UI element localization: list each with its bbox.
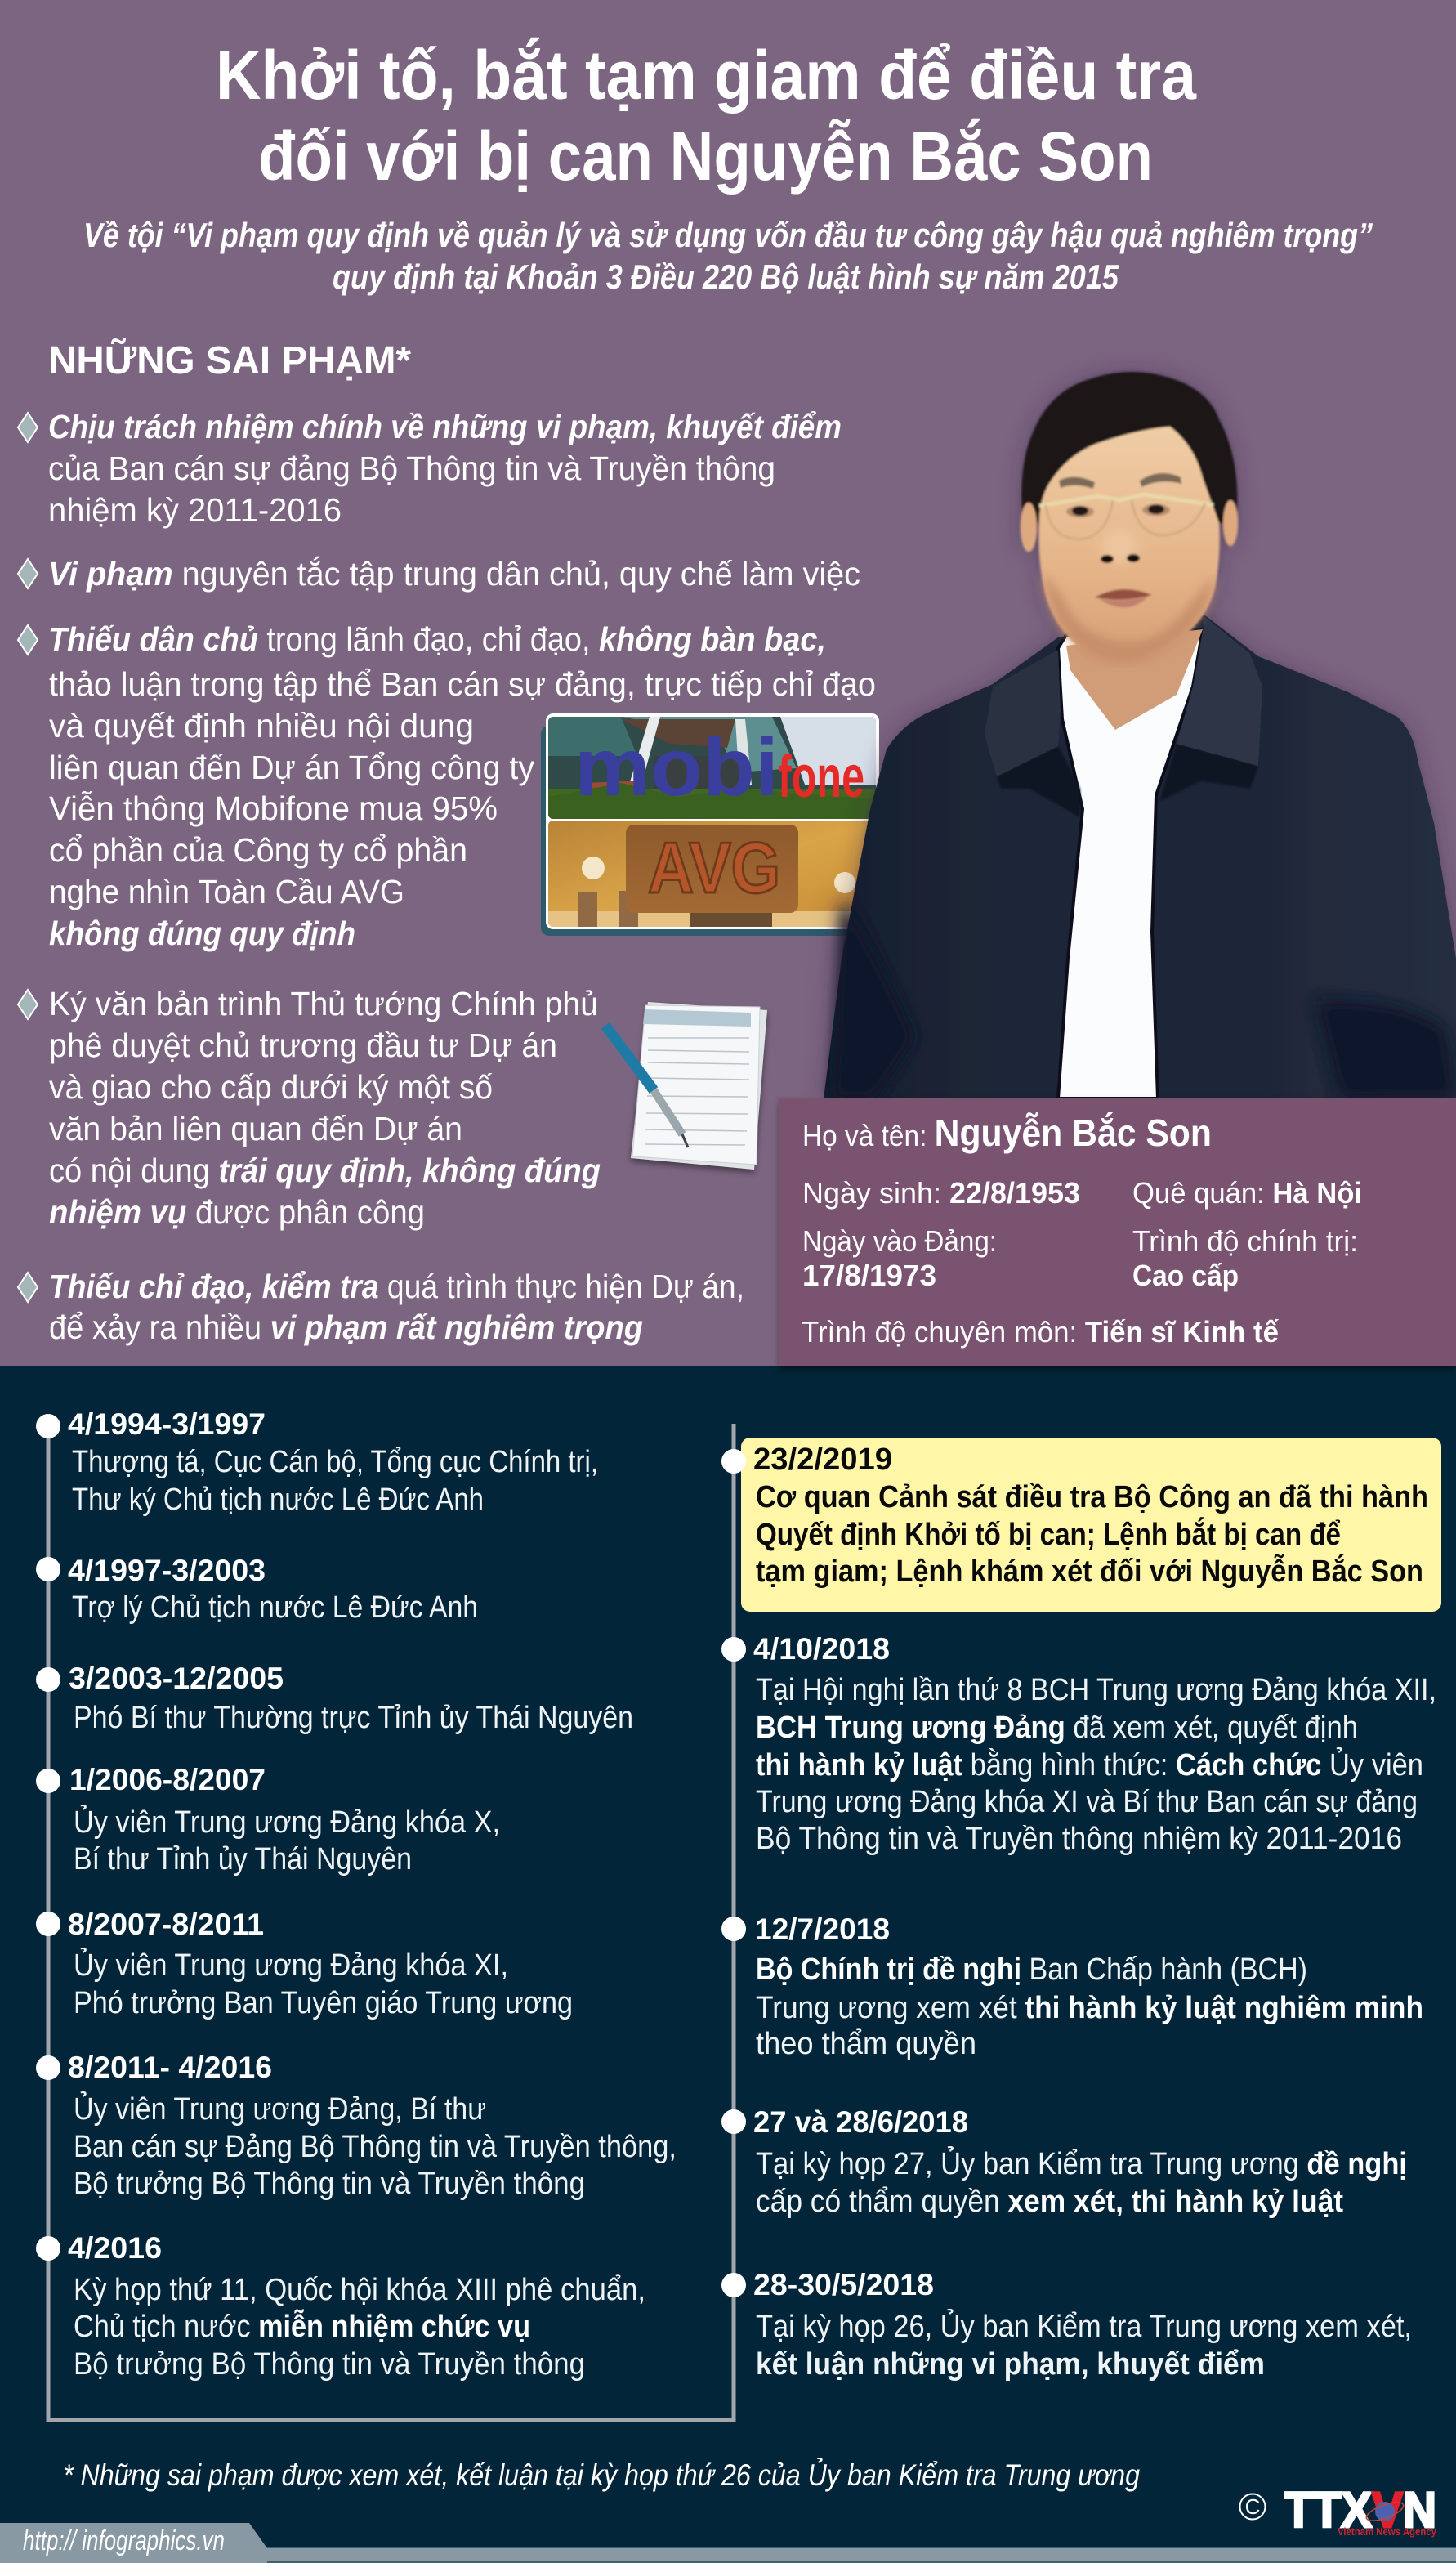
bullet 4: và giao cho cấp dưới ký một số xyxy=(49,1068,493,1106)
hometown: Quê quán: Hà Nội xyxy=(1132,1176,1362,1210)
bullet 4: phê duyệt chủ trương đầu tư Dự án xyxy=(49,1027,557,1064)
event 4/2016: Bộ trưởng Bộ Thông tin và Truyền thông xyxy=(74,2347,585,2382)
bullet 3: liên quan đến Dự án Tổng công ty xyxy=(49,749,534,786)
highlighted event 23/2/2019 xyxy=(721,1438,1441,1612)
event 2011-2016: Ủy viên Trung ương Đảng, Bí thư xyxy=(74,2091,486,2127)
political level: Trình độ chính trị: xyxy=(1132,1224,1358,1258)
title xyxy=(216,37,1197,195)
logo: TTXVN: C xyxy=(1245,2494,1260,2519)
event 12/7/2018: Bộ Chính trị đề nghị Ban Chấp hành (BCH) xyxy=(756,1952,1307,1987)
event 4/2016 xyxy=(36,2231,645,2382)
event 28-30/5/2018 xyxy=(721,2268,1412,2382)
event 27 và 28/6/2018: 27 và 28/6/2018 xyxy=(753,2105,968,2139)
event 4/2016: Chủ tịch nước miễn nhiệm chức vụ xyxy=(74,2308,530,2344)
political level xyxy=(1132,1224,1358,1292)
panel: case timeline right column xyxy=(721,1438,1441,2382)
event 4/10/2018 xyxy=(721,1632,1436,1856)
portrait of Nguyễn Bắc Son xyxy=(824,372,1456,1098)
bullet 3 xyxy=(18,620,876,952)
event 2011-2016: Bộ trưởng Bộ Thông tin và Truyền thông xyxy=(74,2167,585,2201)
event 1994-1997: Thư ký Chủ tịch nước Lê Đức Anh xyxy=(72,1483,484,1517)
event 1994-1997 xyxy=(36,1407,598,1517)
panel: dark timeline background xyxy=(0,1366,1456,2563)
event 1994-1997: Thượng tá, Cục Cán bộ, Tổng cục Chính trị, xyxy=(72,1445,598,1479)
panel: purple upper background xyxy=(0,0,1456,1366)
photo: AVG sign xyxy=(548,821,876,927)
bullet 4 xyxy=(18,985,601,1231)
bullet 2: Vi phạm nguyên tắc tập trung dân chủ, quy chế làm việc xyxy=(48,555,860,593)
event 2007-2011 xyxy=(36,1908,573,2020)
event 2006-2007: Bí thư Tỉnh ủy Thái Nguyên xyxy=(74,1842,412,1876)
icon: document and pen xyxy=(605,1002,767,1170)
bullet 1: của Ban cán sự đảng Bộ Thông tin và Truyền thông xyxy=(48,450,775,487)
image: Mobifone and AVG photos xyxy=(541,713,879,936)
event 28-30/5/2018: kết luận những vi phạm, khuyết điểm xyxy=(756,2347,1265,2382)
bullet 3: Viễn thông Mobifone mua 95% xyxy=(49,789,498,827)
event 27 và 28/6/2018: cấp có thẩm quyền xem xét, thi hành kỷ luật xyxy=(756,2185,1343,2219)
photo: Mobifone building: fone xyxy=(778,745,864,810)
political level: Cao cấp xyxy=(1132,1259,1239,1292)
subtitle: quy định tại Khoản 3 Điều 220 Bộ luật hình sự năm 2015 xyxy=(333,257,1119,296)
bullet 5: để xảy ra nhiều vi phạm rất nghiêm trọng xyxy=(49,1308,643,1346)
event 28-30/5/2018: 28-30/5/2018 xyxy=(753,2268,934,2301)
title: Khởi tố, bắt tạm giam để điều tra xyxy=(216,37,1197,114)
bullet 3: Thiếu dân chủ trong lãnh đạo, chỉ đạo, không bàn bạc, xyxy=(48,620,826,658)
event 12/7/2018: 12/7/2018 xyxy=(755,1912,890,1946)
event 4/10/2018: Bộ Thông tin và Truyền thông nhiệm kỳ 2011-2016 xyxy=(756,1822,1402,1856)
event 4/10/2018: 4/10/2018 xyxy=(753,1632,890,1666)
title: đối với bị can Nguyễn Bắc Son xyxy=(258,118,1153,195)
bullet 4: nhiệm vụ được phân công xyxy=(49,1193,425,1231)
event 2006-2007 xyxy=(36,1763,500,1876)
bullet 3: và quyết định nhiều nội dung xyxy=(49,707,474,745)
party admission date: 17/8/1973 xyxy=(802,1259,936,1292)
event 4/2016: Kỳ họp thứ 11, Quốc hội khóa XIII phê chuẩn, xyxy=(74,2273,645,2307)
professional level: Trình độ chuyên môn: Tiến sĩ Kinh tế xyxy=(802,1315,1280,1349)
bullet 5 xyxy=(18,1268,744,1346)
party admission date xyxy=(802,1224,997,1292)
full name: Họ và tên: Nguyễn Bắc Son xyxy=(802,1112,1212,1154)
event 2011-2016 xyxy=(36,2051,677,2201)
logo: TTXVN: TTXVN xyxy=(1284,2482,1436,2538)
bullet 1: nhiệm kỳ 2011-2016 xyxy=(48,491,342,529)
event 27 và 28/6/2018: Tại kỳ họp 27, Ủy ban Kiểm tra Trung ương đề nghị xyxy=(756,2145,1407,2181)
event 1997-2003 xyxy=(36,1554,478,1625)
bullet 1: Chịu trách nhiệm chính về những vi phạm, khuyết điểm xyxy=(48,408,842,445)
event 12/7/2018 xyxy=(721,1912,1423,2061)
event 2003-2005: 3/2003-12/2005 xyxy=(69,1662,284,1695)
highlighted event 23/2/2019: Quyết định Khởi tố bị can; Lệnh bắt bị can để xyxy=(756,1516,1341,1552)
event 1997-2003: Trợ lý Chủ tịch nước Lê Đức Anh xyxy=(72,1590,478,1625)
highlighted event 23/2/2019: 23/2/2019 xyxy=(753,1443,892,1477)
event 1994-1997: 4/1994-3/1997 xyxy=(68,1407,266,1441)
event 2007-2011: Phó trưởng Ban Tuyên giáo Trung ương xyxy=(74,1986,573,2020)
panel: personal information xyxy=(779,1098,1456,1366)
event 27 và 28/6/2018 xyxy=(721,2105,1407,2219)
bullet 3: không đúng quy định xyxy=(49,915,355,952)
photo: AVG sign: AVG xyxy=(648,827,780,908)
event 2003-2005: Phó Bí thư Thường trực Tỉnh ủy Thái Nguyên xyxy=(74,1701,633,1735)
subtitle xyxy=(83,216,1373,296)
footnote: * Những sai phạm được xem xét, kết luận tại kỳ họp thứ 26 của Ủy ban Kiểm tra Trung ương xyxy=(63,2458,1140,2492)
bullet 4: Ký văn bản trình Thủ tướng Chính phủ xyxy=(49,985,598,1022)
event 12/7/2018: theo thẩm quyền xyxy=(756,2027,976,2061)
event 2007-2011: Ủy viên Trung ương Đảng khóa XI, xyxy=(74,1947,508,1983)
event 4/2016: 4/2016 xyxy=(68,2231,162,2265)
event 2011-2016: Ban cán sự Đảng Bộ Thông tin và Truyền thông, xyxy=(74,2130,677,2164)
event 2006-2007: Ủy viên Trung ương Đảng khóa X, xyxy=(74,1804,500,1840)
bullet 5: Thiếu chỉ đạo, kiểm tra quá trình thực hiện Dự án, xyxy=(49,1268,744,1305)
bullet 1 xyxy=(18,408,842,529)
heading: những sai phạm: NHỮNG SAI PHẠM* xyxy=(48,338,411,382)
event 2003-2005 xyxy=(36,1662,633,1735)
photo: Mobifone building xyxy=(548,717,876,819)
panel: career timeline left column xyxy=(36,1407,677,2382)
event 2006-2007: 1/2006-8/2007 xyxy=(69,1763,266,1796)
event 2007-2011: 8/2007-8/2011 xyxy=(68,1908,264,1941)
bullet 3: nghe nhìn Toàn Cầu AVG xyxy=(49,873,404,910)
bullet 3: cổ phần của Công ty cổ phần xyxy=(49,831,467,869)
bullet 3: thảo luận trong tập thể Ban cán sự đảng, trực tiếp chỉ đạo xyxy=(49,665,876,703)
bullet 4: có nội dung trái quy định, không đúng xyxy=(49,1152,601,1189)
bullet 4: văn bản liên quan đến Dự án xyxy=(49,1110,462,1147)
event 12/7/2018: Trung ương xem xét thi hành kỷ luật nghiêm minh xyxy=(756,1991,1423,2025)
logo: TTXVN: Vietnam News Agency xyxy=(1338,2525,1437,2538)
event 2011-2016: 8/2011- 4/2016 xyxy=(68,2051,272,2084)
event 1997-2003: 4/1997-3/2003 xyxy=(68,1554,266,1587)
panel: violations list xyxy=(18,408,876,1346)
event 4/10/2018: thi hành kỷ luật bằng hình thức: Cách chức Ủy viên xyxy=(756,1747,1423,1782)
timeline frame line xyxy=(48,1424,734,2420)
footer bar with source tab xyxy=(0,2523,1456,2563)
footer bar with source tab: http:// infographics.vn xyxy=(23,2525,225,2556)
date of birth: Ngày sinh: 22/8/1953 xyxy=(802,1176,1080,1210)
party admission date: Ngày vào Đảng: xyxy=(802,1224,997,1258)
photo: Mobifone building: mobi xyxy=(574,722,779,813)
event 4/10/2018: BCH Trung ương Đảng đã xem xét, quyết định xyxy=(756,1711,1358,1745)
